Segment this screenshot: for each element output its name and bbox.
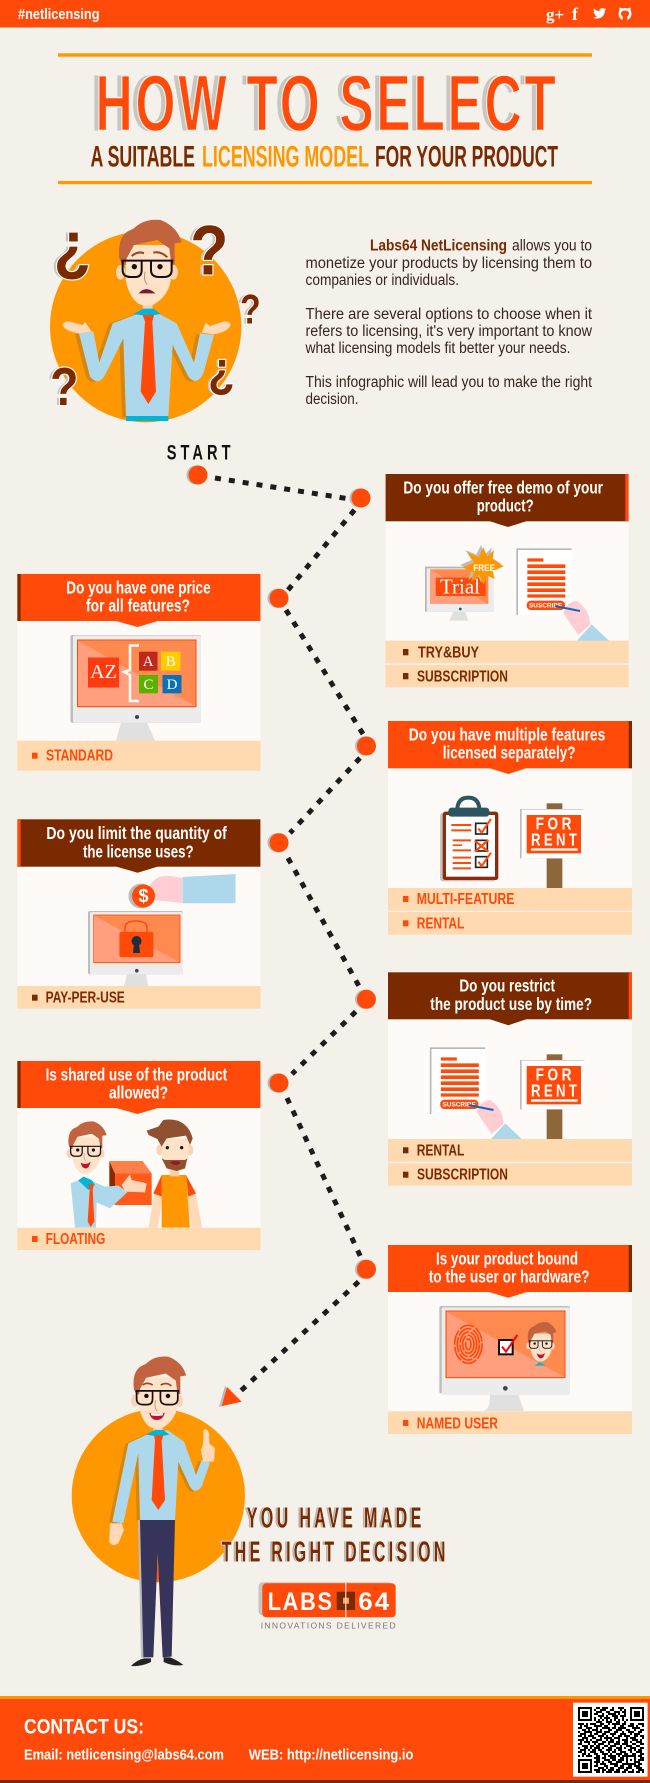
- icon: subscribe paper and hand: [430, 1047, 523, 1140]
- panel header: [17, 574, 260, 627]
- icon: trial monitor with free badge: Trial: [440, 577, 480, 599]
- intro text: monetize your products by licensing them to: [306, 255, 592, 272]
- answers: [388, 888, 632, 935]
- Labs64 logo: 64: [358, 1588, 391, 1616]
- footer: [0, 1696, 650, 1783]
- Labs64 logo: LABS: [268, 1588, 334, 1616]
- QR code: [573, 1703, 648, 1777]
- subtitle: LICENSING MODEL: [202, 141, 369, 174]
- subtitle: A SUITABLE: [90, 141, 195, 174]
- panel header: product?: [477, 496, 534, 516]
- panel: limit quantity question: [17, 819, 260, 1009]
- contact email: Email: netlicensing@labs64.com: [24, 1746, 224, 1763]
- icon: trial monitor with free badge: FREE: [473, 563, 495, 573]
- question marks: ¿: [208, 342, 235, 398]
- panel header: Do you have one price: [66, 577, 211, 597]
- intro text: companies or individuals.: [306, 272, 459, 289]
- panel header: [388, 972, 632, 1025]
- icon: checklist clipboard: [440, 798, 498, 881]
- panel header: Do you limit the quantity of: [46, 823, 227, 843]
- icon: monitor with AZ blocks: [70, 635, 201, 741]
- intro text: refers to licensing, it's very important to know: [306, 323, 593, 340]
- Labs64 logo: [258, 1582, 396, 1630]
- panel header: to the user or hardware?: [429, 1267, 590, 1287]
- icon: for rent sign: RENT: [531, 830, 580, 850]
- start label: START: [167, 440, 235, 464]
- answer: PAY-PER-USE: [46, 990, 125, 1007]
- icon: for rent sign: RENT: [531, 1081, 580, 1101]
- intro text: decision.: [306, 391, 358, 408]
- icon: monitor with AZ blocks: D: [167, 677, 178, 693]
- panel header: allowed?: [109, 1083, 168, 1103]
- man with glasses: [67, 1121, 147, 1228]
- subtitle: [90, 141, 558, 174]
- panel header: Do you restrict: [459, 976, 555, 996]
- panel: multiple features question: [388, 721, 632, 935]
- contact heading: CONTACT US:: [24, 1716, 144, 1739]
- social icons: f: [572, 4, 579, 24]
- panel header: the license uses?: [83, 841, 194, 861]
- intro text: There are several options to choose when it: [306, 306, 593, 323]
- intro text: what licensing models fit better your needs.: [305, 340, 570, 357]
- closing message: THE RIGHT DECISION: [220, 1536, 447, 1568]
- icon: for rent sign: FOR: [536, 1064, 575, 1084]
- panel header: Is shared use of the product: [46, 1064, 227, 1084]
- answers: RENTAL: [417, 1143, 464, 1160]
- answers: [386, 641, 629, 687]
- icon: monitor with AZ blocks: A: [143, 654, 154, 670]
- closing message: [220, 1502, 449, 1568]
- answers: SUBSCRIPTION: [417, 1166, 508, 1183]
- closing message: YOU HAVE MADE: [247, 1502, 425, 1534]
- panel: free demo question: [386, 474, 629, 687]
- answers: SUBSCRIPTION: [417, 669, 508, 686]
- answers: RENTAL: [417, 915, 464, 932]
- answer: [17, 986, 260, 1009]
- hashtag: #netlicensing: [18, 6, 100, 23]
- panel header: [17, 819, 260, 873]
- panel header: [386, 474, 629, 527]
- answers: [388, 1139, 632, 1186]
- answer: FLOATING: [46, 1231, 105, 1248]
- illustration: happy man thumbs up: [72, 1357, 245, 1666]
- social icons: g+: [546, 5, 564, 24]
- icon: monitor with AZ blocks: B: [166, 654, 176, 670]
- question marks: ¿: [54, 209, 91, 283]
- answers: TRY&BUY: [418, 644, 480, 661]
- answers: MULTI-FEATURE: [417, 891, 514, 908]
- icon: subscribe paper and hand: SUSCRIBE: [529, 604, 562, 610]
- question marks: ¿: [205, 342, 232, 398]
- icon: monitor with AZ blocks: AZ: [90, 661, 117, 683]
- bearded man: [147, 1120, 202, 1228]
- arrow head: [219, 1386, 242, 1407]
- icon: for rent sign: [520, 803, 584, 888]
- panel header: for all features?: [86, 596, 190, 616]
- icon: monitor with padlock: [88, 911, 183, 986]
- illustration: two men sharing a box: [67, 1120, 202, 1228]
- social icons: [546, 4, 632, 24]
- flow nodes: [186, 466, 376, 1279]
- icon: hand dropping coin: [128, 874, 236, 908]
- panel header: [388, 1245, 632, 1298]
- panel header: licensed separately?: [443, 743, 576, 763]
- closing message: YOU HAVE MADE: [245, 1502, 423, 1534]
- illustration: confused man with question marks: [47, 209, 261, 422]
- question marks: ?: [47, 358, 75, 417]
- answer: STANDARD: [46, 748, 113, 765]
- panel header: [17, 1061, 260, 1114]
- icon: hand dropping coin: $: [138, 886, 149, 906]
- answer: [388, 1411, 632, 1434]
- question marks: ?: [240, 285, 261, 332]
- question marks: ?: [237, 285, 258, 332]
- answer: [17, 1228, 260, 1250]
- panel header: [388, 721, 632, 774]
- contact web: WEB: http://netlicensing.io: [249, 1746, 413, 1763]
- icon: monitor with AZ blocks: C: [143, 677, 154, 693]
- question marks: [47, 209, 261, 417]
- panel header: the product use by time?: [430, 994, 592, 1014]
- question marks: ?: [50, 358, 78, 417]
- intro text: This infographic will lead you to make the right: [306, 374, 593, 391]
- icon: trial monitor with free badge: [425, 545, 504, 621]
- icon: subscribe paper and hand: [516, 548, 609, 641]
- intro text: [305, 238, 593, 408]
- icon: for rent sign: FOR: [536, 813, 575, 833]
- Labs64 logo: INNOVATIONS DELIVERED: [261, 1620, 396, 1630]
- question marks: ?: [187, 210, 225, 289]
- icon: for rent sign: [520, 1054, 584, 1139]
- closing message: THE RIGHT DECISION: [222, 1536, 449, 1568]
- answer: NAMED USER: [417, 1415, 498, 1432]
- panel: shared use question: [17, 1061, 260, 1250]
- panel: bound to user or hardware question: [388, 1245, 632, 1434]
- panel: one price question: [17, 574, 260, 771]
- panel header: Is your product bound: [436, 1248, 578, 1268]
- top header bar: [0, 0, 650, 28]
- title block: [58, 53, 592, 184]
- intro text: Labs64 NetLicensing: [370, 238, 507, 255]
- answer: [17, 741, 260, 771]
- question marks: ¿: [50, 209, 88, 283]
- panel: restrict by time question: [388, 972, 632, 1186]
- icon: monitor with fingerprint and user: [439, 1306, 570, 1411]
- question marks: ?: [190, 210, 228, 289]
- box: [109, 1161, 152, 1205]
- dashed flow path: [215, 478, 363, 1392]
- intro text: allows you to: [512, 238, 592, 255]
- icon: subscribe paper and hand: SUSCRIBE: [442, 1103, 476, 1109]
